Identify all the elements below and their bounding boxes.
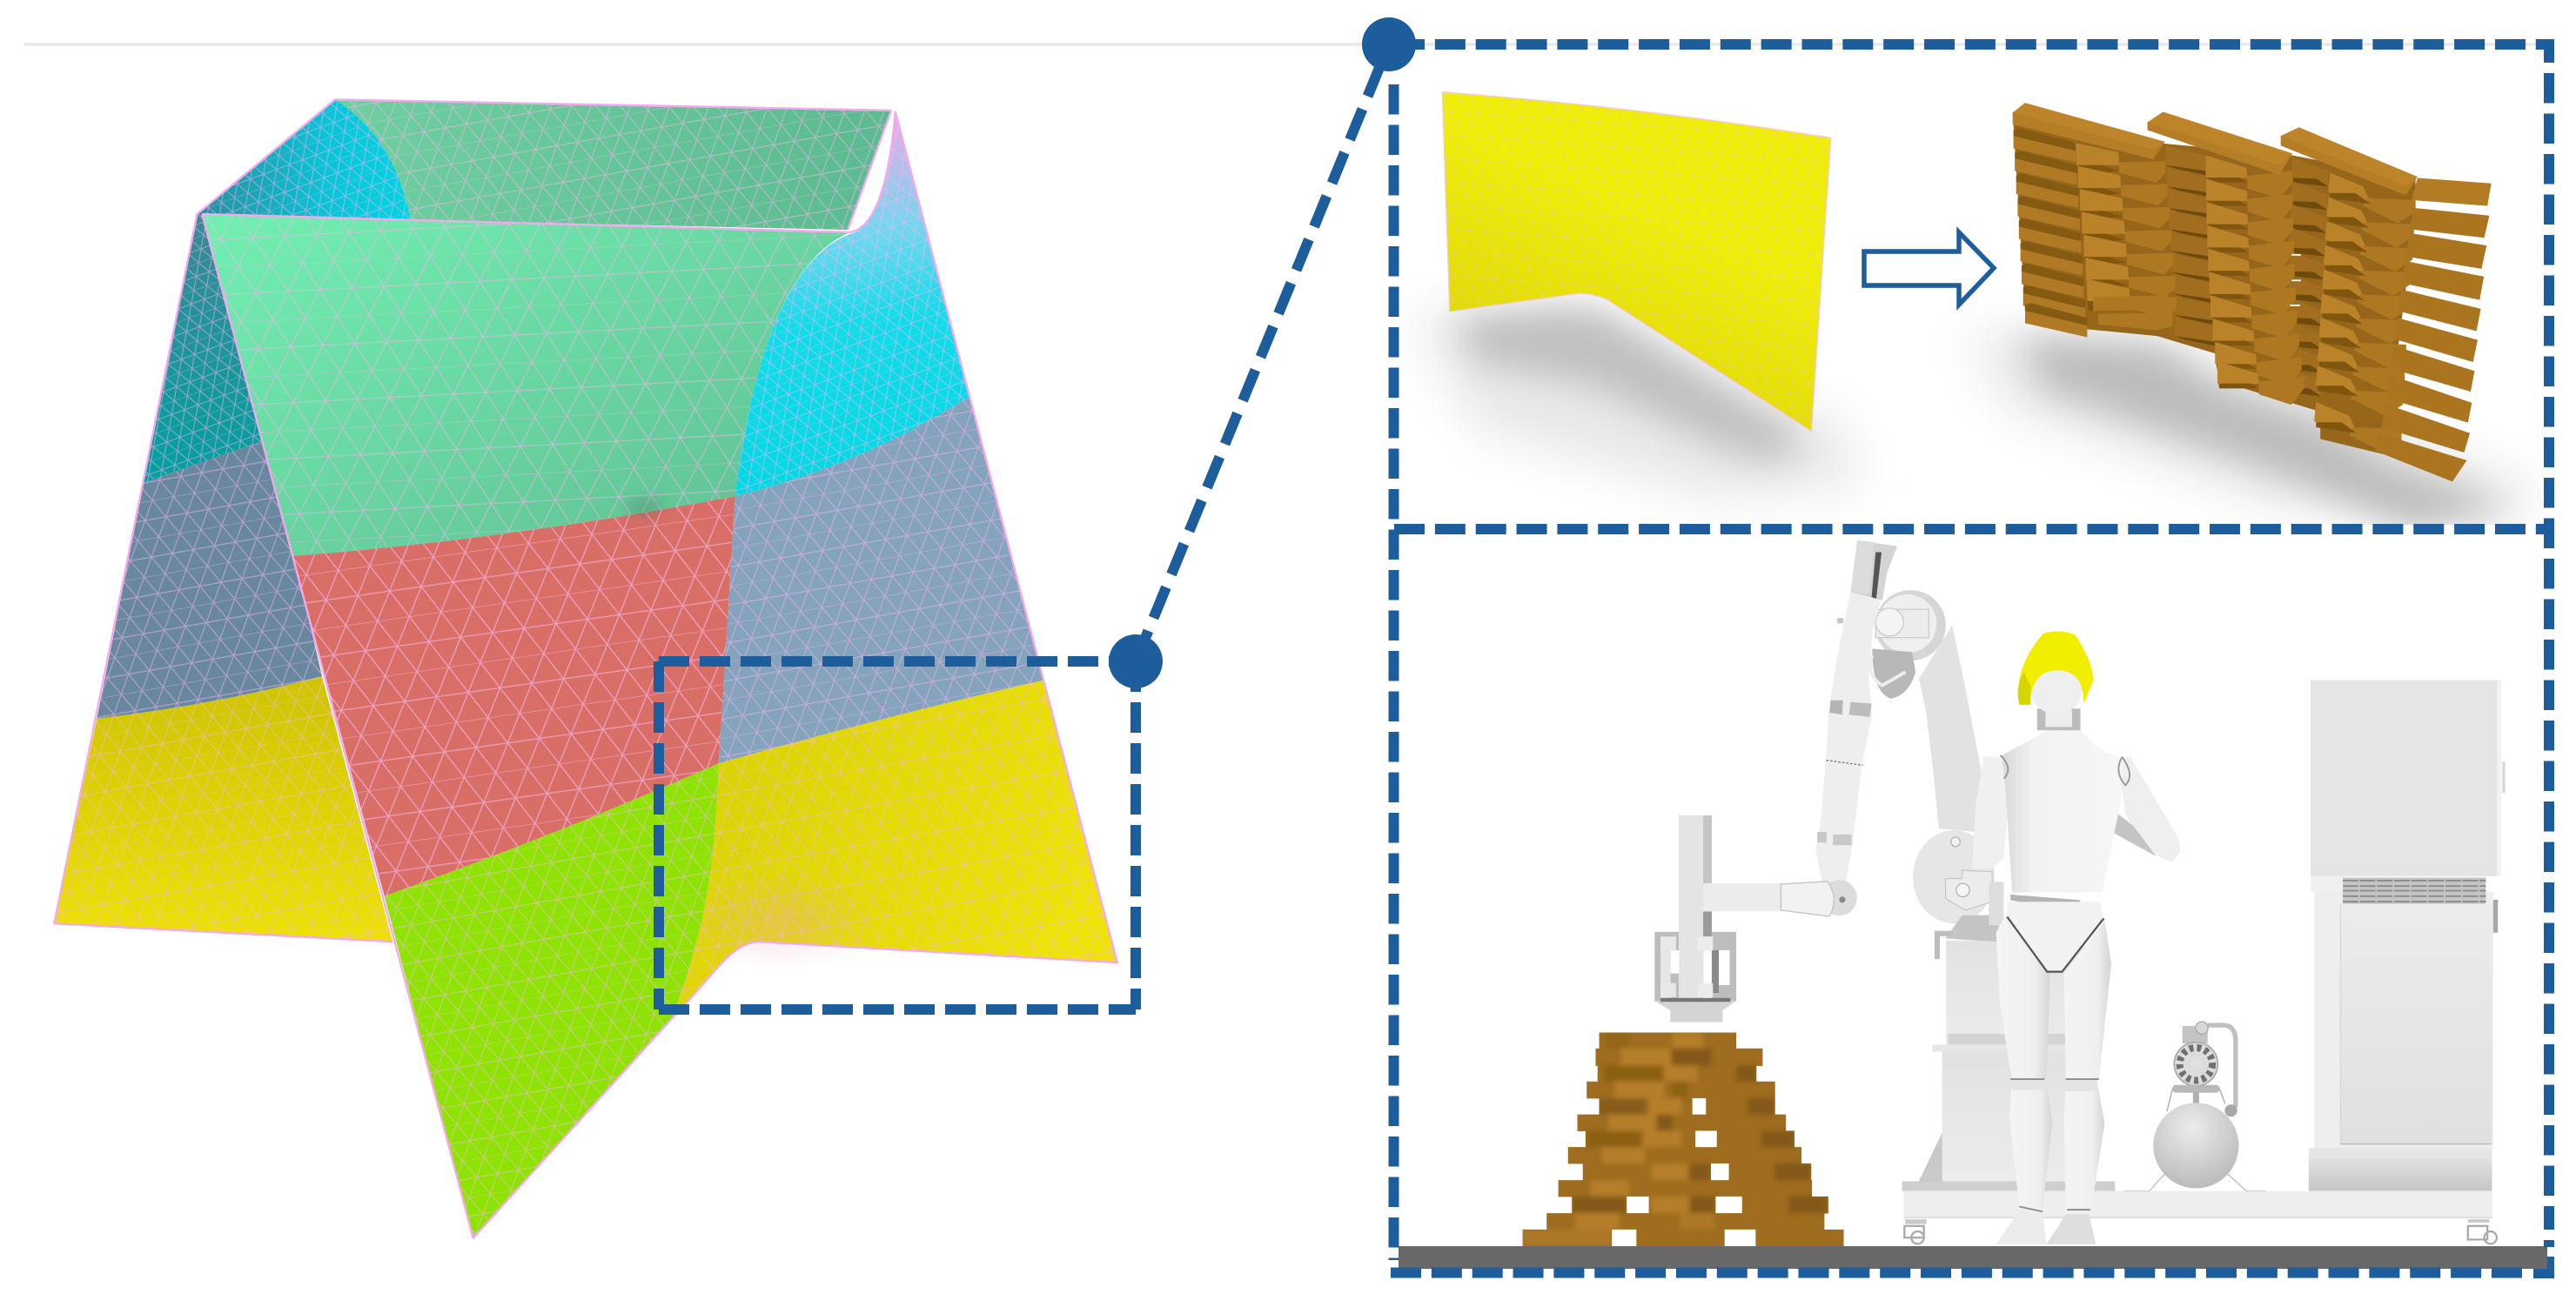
- left blue-grey band: [97, 439, 322, 719]
- lime panel: [385, 763, 719, 1238]
- robot base frame: [1902, 941, 2492, 1244]
- forearm details: [1817, 618, 1872, 845]
- back green panel: [335, 99, 891, 230]
- upper panel: surface to blocks: [1412, 92, 2542, 528]
- shoulder disc: [1913, 830, 2004, 959]
- timber block wall: [2013, 103, 2492, 482]
- left teal band: [144, 214, 267, 483]
- bottom-right dashed corner: [2533, 1257, 2554, 1278]
- crease shadow: [627, 498, 663, 518]
- back cyan panel: [198, 99, 411, 220]
- red panel: [293, 496, 735, 896]
- human worker: [1972, 632, 2180, 1244]
- air compressor: [2124, 1022, 2266, 1191]
- right blue-grey band: [719, 397, 1043, 763]
- right caster: [2468, 1219, 2497, 1244]
- surface outline: [54, 99, 1117, 1238]
- wrist joint: [1870, 590, 1946, 699]
- floor slab: [1399, 1246, 2547, 1269]
- rear main link: [1919, 626, 1982, 832]
- lower panel: robotic assembly scene: [1523, 540, 2506, 1246]
- connector node: detail frame: [1362, 17, 1416, 71]
- dashed selection box on surface: [659, 661, 1136, 1009]
- gripper tool: [1654, 815, 1857, 1022]
- right cyan band: [735, 112, 969, 496]
- worker torso and arms: [1972, 725, 2180, 972]
- worker head and yellow hard hat: [2018, 632, 2093, 730]
- worker legs and feet: [1996, 915, 2111, 1244]
- right yellow band: [674, 681, 1117, 1016]
- connector node: selection box: [1109, 634, 1163, 688]
- left yellow band: [54, 676, 392, 942]
- timber block pile: [1523, 1032, 1844, 1246]
- front green panel: [202, 214, 850, 556]
- shadows under surface and block wall: [1412, 307, 2542, 528]
- dashed frame: detail panels: [1391, 39, 2554, 1272]
- yellow single surface: [1442, 92, 1831, 432]
- arrow: surface to blocks: [1864, 232, 1994, 305]
- arm tool cap: [1850, 540, 1897, 600]
- dashed connector line: [1136, 44, 1389, 661]
- robot arm: [1815, 540, 2004, 959]
- cabinet: [2309, 681, 2506, 1191]
- forearm link: [1815, 592, 1881, 883]
- top rule line: [24, 44, 2554, 45]
- coloured folded mesh surface: [54, 99, 1117, 1238]
